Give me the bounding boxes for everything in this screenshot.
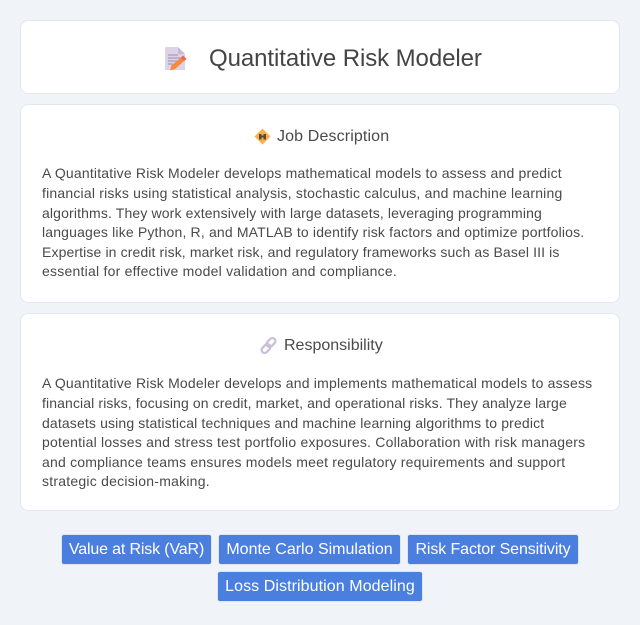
body text: job description: languages like Python, R, and MATLAB to identify risk factors and optimize portfolios. [42, 224, 584, 240]
body text: responsibility: A Quantitative Risk Modeler develops and implements mathematical models to assess [42, 375, 592, 391]
tag: risk factor [407, 534, 579, 565]
tag: loss distribution [217, 571, 423, 602]
body text: responsibility [42, 375, 592, 489]
tag: monte carlo [218, 534, 401, 565]
tag: loss distribution: Loss Distribution Modeling [225, 578, 415, 595]
body text: responsibility: financial risks, focusing on credit, market, and operational risks. They analyze large [42, 395, 567, 411]
tag: monte carlo: Monte Carlo Simulation [226, 541, 393, 558]
panel: job description [20, 104, 620, 303]
body text: job description: financial risks using statistical analysis, stochastic calculus, and machine learning [42, 185, 562, 201]
body text: responsibility: and compliance teams ensures models meet regulatory requirements and support [42, 454, 565, 470]
tags [61, 534, 579, 602]
body text: job description: algorithms. They work extensively with large datasets, leveraging programming [42, 205, 542, 221]
body text: job description [42, 165, 584, 279]
tag: value at risk: Value at Risk (VaR) [69, 541, 204, 558]
heading: responsibility: Responsibility [284, 337, 383, 354]
body text: job description: essential for effective model validation and compliance. [42, 263, 397, 279]
tag: risk factor: Risk Factor Sensitivity [415, 541, 571, 558]
heading: job description: Job Description [277, 128, 389, 145]
icon: document with pencil [165, 47, 186, 70]
tag: value at risk [61, 534, 212, 565]
title: Quantitative Risk Modeler [209, 45, 482, 72]
icon: diamond sign [254, 128, 270, 144]
icon: link [260, 337, 276, 354]
title card [20, 20, 620, 94]
body text: job description: Expertise in credit risk, market risk, and regulatory frameworks such as Basel III is [42, 244, 559, 260]
body text: responsibility: strategic decision-making. [42, 473, 210, 489]
body text: job description: A Quantitative Risk Modeler develops mathematical models to assess and predict [42, 165, 562, 181]
panel: responsibility [20, 313, 620, 511]
body text: responsibility: datasets using statistical techniques and machine learning algorithms to predict [42, 415, 544, 431]
body text: responsibility: potential losses and stress test portfolio exposures. Collaboration with risk managers [42, 434, 585, 450]
